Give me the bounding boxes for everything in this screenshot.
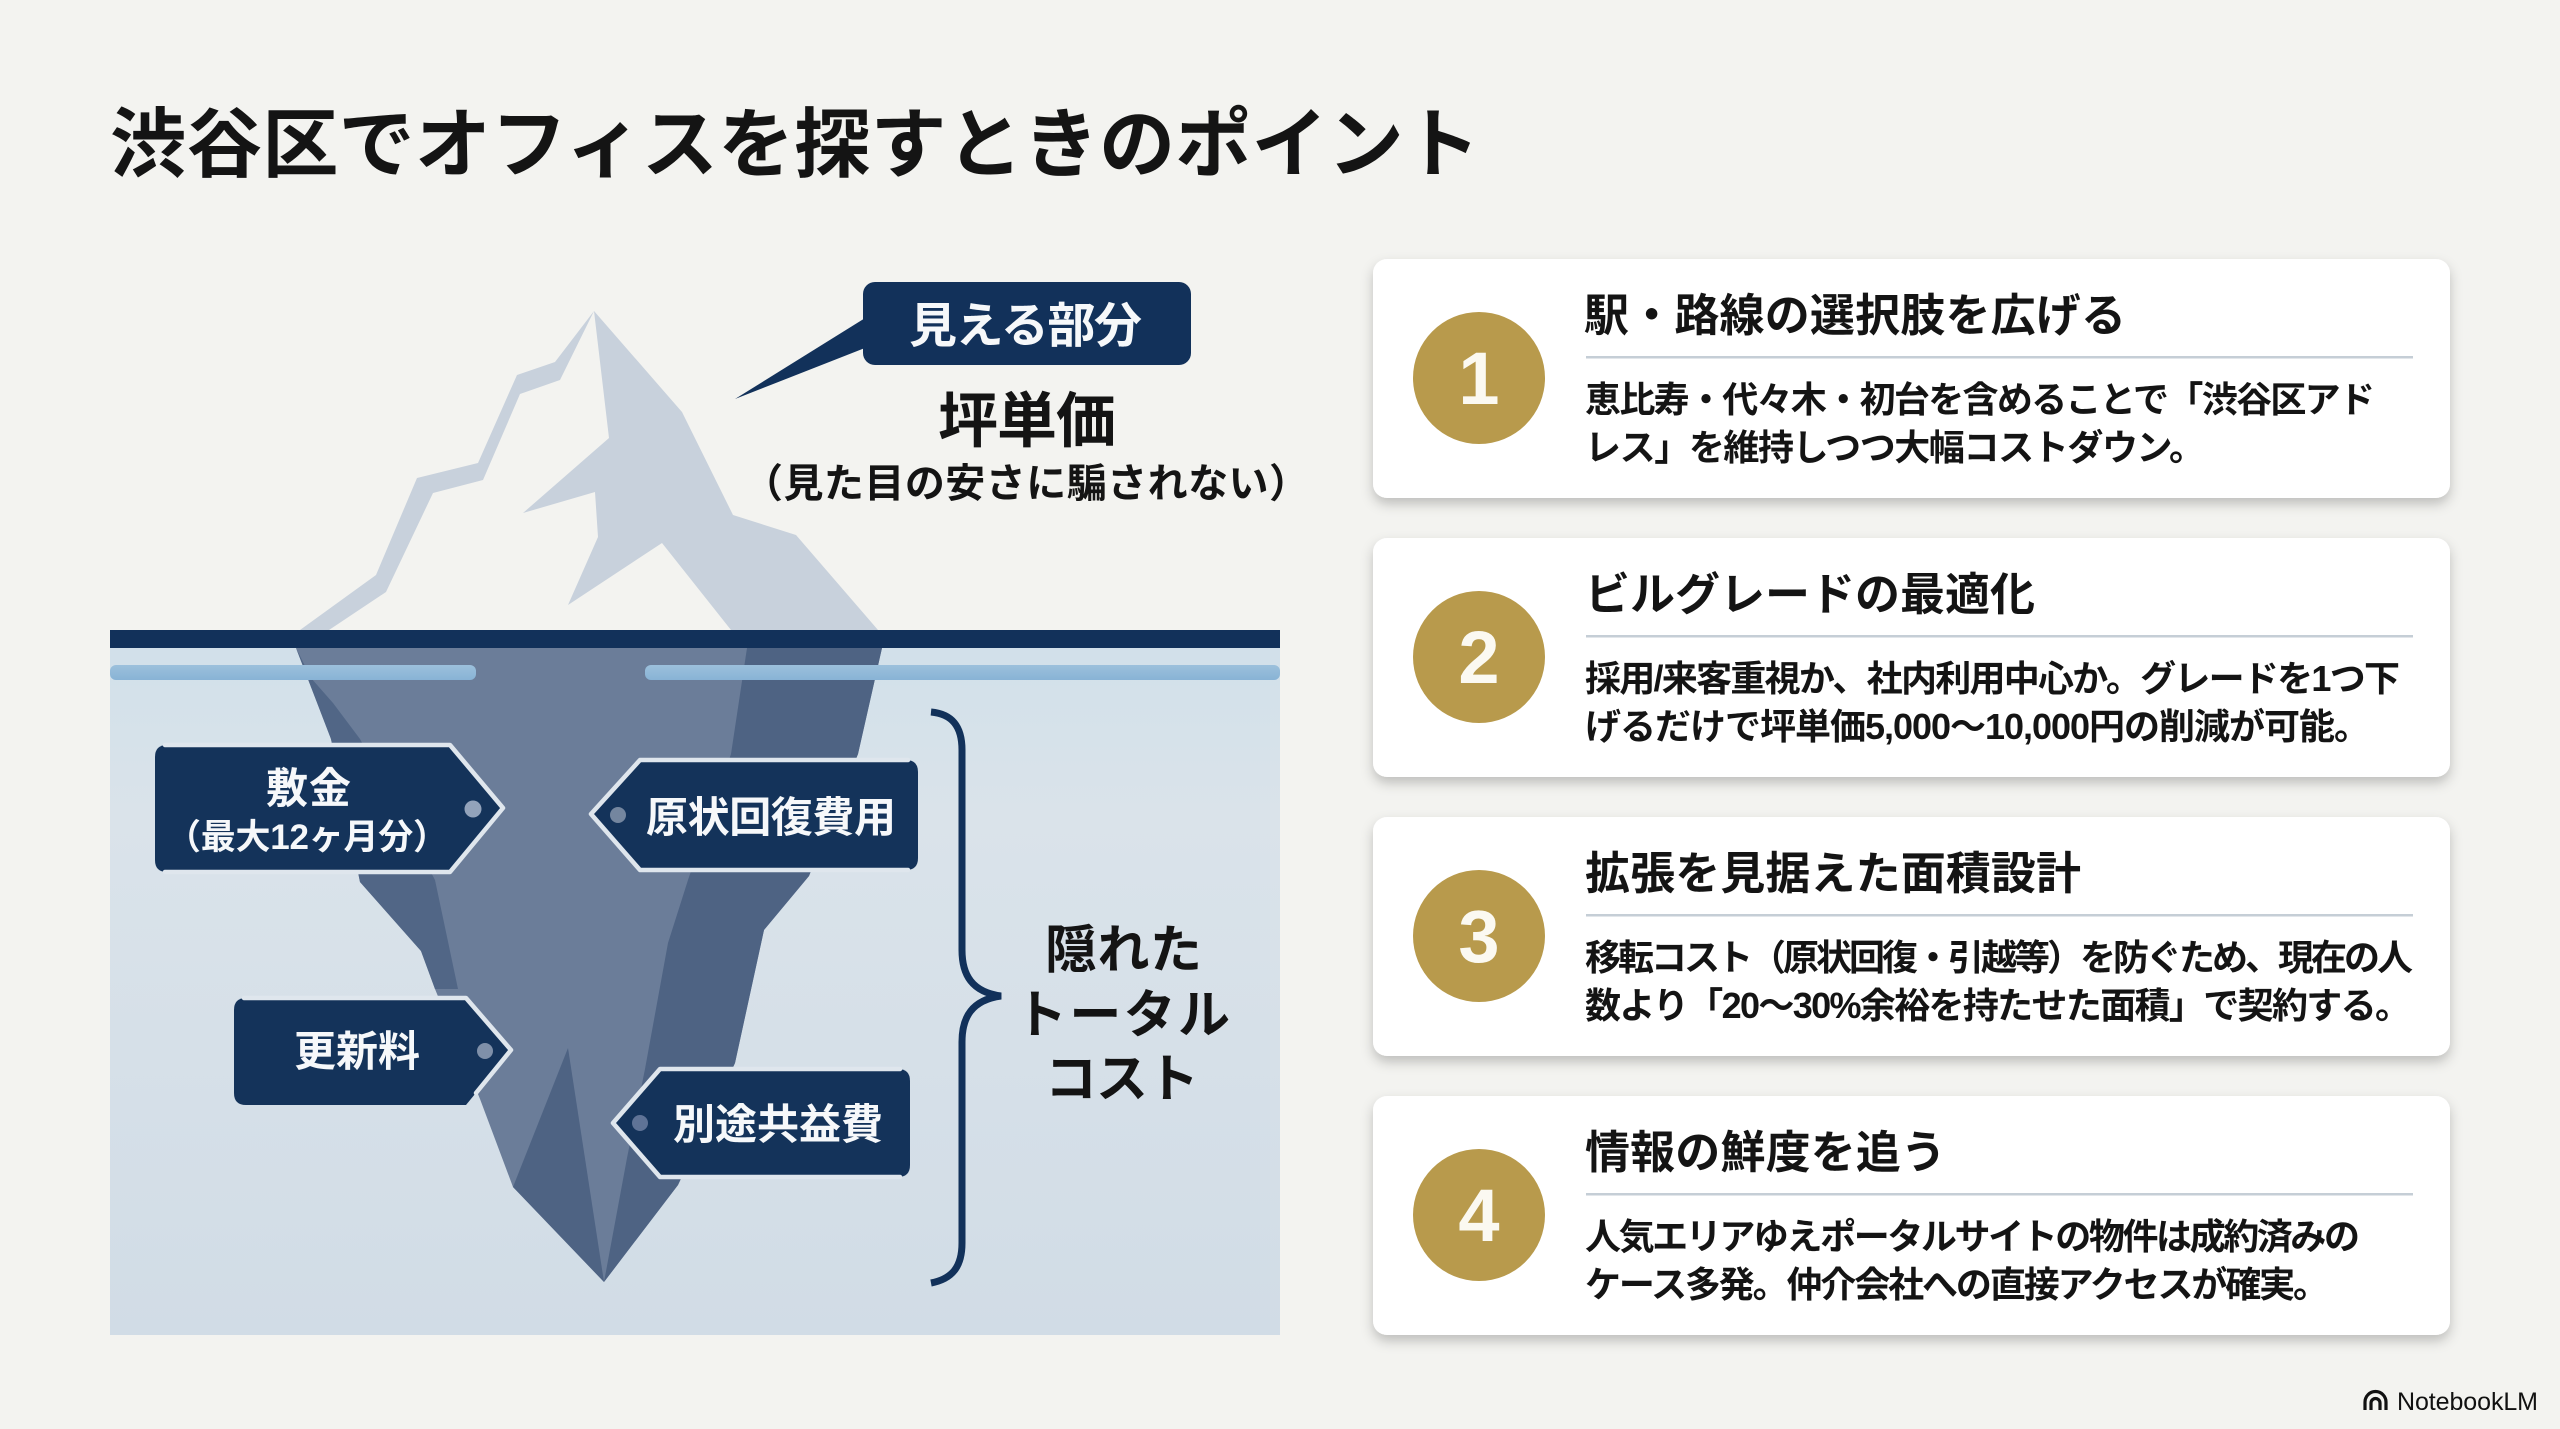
label: hidden total cost: トータル	[1015, 973, 1230, 1048]
heading 4: 情報の鮮度を追う	[1585, 1116, 1946, 1181]
body 1	[1585, 379, 2375, 468]
water	[110, 640, 1280, 1335]
icon: number 1	[1413, 312, 1545, 444]
body 3: 数より「20～30%余裕を持たせた面積」で契約する。	[1585, 985, 2411, 1026]
body 1: レス」を維持しつつ大幅コストダウン。	[1585, 427, 2205, 468]
body 3	[1585, 937, 2413, 1026]
body 2: げるだけで坪単価5,000～10,000円の削減が可能。	[1585, 706, 2370, 747]
tag: deposit: 敷金	[266, 765, 351, 812]
tag: renewal fee: 更新料	[294, 1028, 420, 1075]
logo: NotebookLM: NotebookLM	[2397, 1388, 2538, 1416]
tag: restoration cost: 原状回復費用	[646, 794, 896, 841]
brace	[931, 712, 1001, 1283]
label: hidden total cost	[1015, 908, 1230, 1112]
panel: iceberg diagram	[110, 282, 1309, 1335]
tag: deposit	[155, 745, 503, 872]
light stripe right	[645, 665, 1280, 680]
icon: number 3: 3	[1458, 895, 1500, 978]
tag: deposit: （最大12ヶ月分）	[166, 818, 448, 857]
tag: common fee: 別途共益費	[673, 1101, 883, 1148]
icon: number 3	[1413, 870, 1545, 1002]
callout: visible part: 見える部分	[909, 286, 1142, 356]
icon: number 4: 4	[1458, 1174, 1500, 1257]
heading 1: 駅・路線の選択肢を広げる	[1584, 279, 2126, 344]
icon: number 1: 1	[1458, 337, 1500, 420]
label: hidden total cost: コスト	[1045, 1037, 1199, 1112]
iceberg above water	[300, 311, 878, 630]
body 4	[1585, 1216, 2360, 1305]
title: 渋谷区でオフィスを探すときのポイント	[110, 83, 1480, 193]
panel: point 3	[1373, 817, 2450, 1056]
body 3: 移転コスト（原状回復・引越等）を防ぐため、現在の人	[1585, 937, 2413, 978]
panel: point 4	[1373, 1096, 2450, 1335]
heading 2: ビルグレードの最適化	[1585, 558, 2035, 623]
panel: point 2	[1373, 538, 2450, 777]
tag: renewal fee	[234, 998, 511, 1105]
tag: restoration cost	[591, 760, 918, 870]
body 4: 人気エリアゆえポータルサイトの物件は成約済みの	[1585, 1216, 2360, 1257]
body 2	[1585, 658, 2400, 747]
label: not fooled: （見た目の安さに騙されない）	[743, 451, 1309, 509]
icon: number 2: 2	[1458, 616, 1500, 699]
icon: number 4	[1413, 1149, 1545, 1281]
body 4: ケース多発。仲介会社への直接アクセスが確実。	[1585, 1264, 2329, 1305]
callout: visible part	[735, 282, 1191, 399]
body 2: 採用/来客重視か、社内利用中心か。グレードを1つ下	[1585, 658, 2400, 699]
label: tsubo price: 坪単価	[938, 373, 1116, 460]
label: hidden total cost: 隠れた	[1045, 908, 1202, 983]
icon: number 2	[1413, 591, 1545, 723]
panel: point 1	[1373, 259, 2450, 498]
light stripe left	[110, 665, 476, 680]
body 1: 恵比寿・代々木・初台を含めることで「渋谷区アド	[1585, 379, 2375, 420]
waterline	[110, 630, 1280, 648]
tag: common fee	[613, 1069, 910, 1177]
iceberg below water	[296, 648, 882, 1282]
heading 3: 拡張を見据えた面積設計	[1585, 837, 2081, 902]
